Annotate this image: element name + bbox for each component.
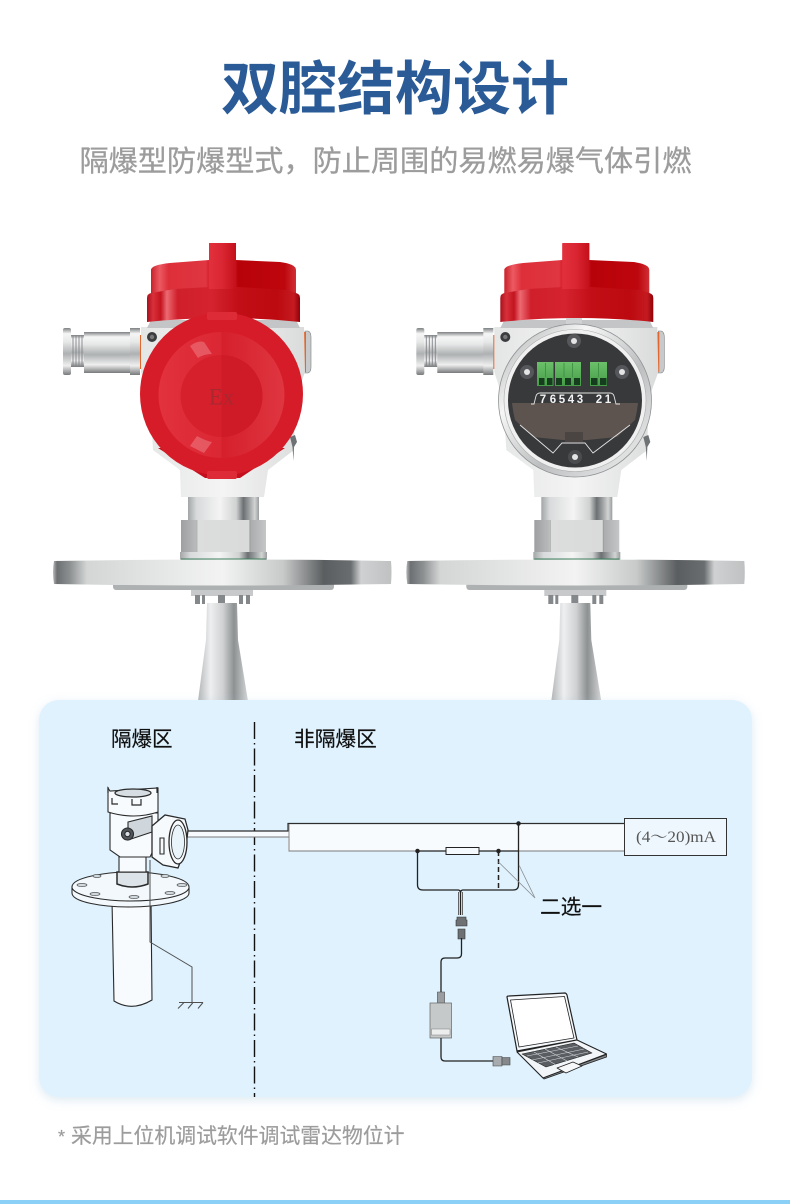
terminal numbers bbox=[540, 394, 612, 406]
laptop bbox=[507, 993, 606, 1079]
label: choose one: 二选一 bbox=[540, 896, 602, 919]
terminal numbers: 7 bbox=[540, 394, 546, 406]
footnote: * bbox=[58, 1127, 65, 1147]
subtitle: 隔爆型防爆型式，防止周围的易燃易爆气体引燃 bbox=[80, 145, 691, 178]
terminal numbers: 3 bbox=[577, 394, 583, 406]
terminal numbers: 5 bbox=[559, 394, 566, 406]
label: explosion-proof zone: 隔爆区 bbox=[111, 728, 172, 751]
bottom accent bar bbox=[0, 1200, 790, 1204]
earth wire and ground symbol bbox=[150, 860, 203, 1008]
leader lines to note bbox=[498, 862, 535, 898]
connector pair and USB adapter cable bbox=[430, 917, 510, 1066]
label: non explosion-proof zone: 非隔爆区 bbox=[294, 728, 377, 751]
instrument line drawing bbox=[72, 787, 189, 1006]
panel: wiring diagram bbox=[39, 700, 752, 1097]
terminal face bbox=[498, 318, 652, 477]
signal band bbox=[158, 824, 624, 851]
title: 双腔结构设计 bbox=[221, 57, 569, 122]
output box: 4-20 mA: (4～20)mA bbox=[636, 829, 717, 846]
terminal numbers: 1 bbox=[605, 394, 612, 406]
terminal numbers: 6 bbox=[550, 394, 556, 406]
product: closed explosion-proof cover bbox=[53, 243, 392, 701]
zone divider bbox=[254, 722, 256, 1097]
red Ex cover bbox=[140, 312, 303, 479]
Ex mark: Ex bbox=[209, 384, 235, 410]
screws bbox=[520, 334, 629, 464]
footnote: 采用上位机调试软件调试雷达物位计 bbox=[71, 1125, 404, 1148]
terminal numbers: 4 bbox=[568, 394, 575, 406]
terminal numbers: 2 bbox=[596, 394, 602, 406]
branch circuit bbox=[416, 822, 520, 915]
product: open terminal compartment bbox=[406, 243, 745, 701]
output box: 4-20 mA bbox=[624, 818, 726, 856]
terminal blocks bbox=[537, 362, 607, 386]
